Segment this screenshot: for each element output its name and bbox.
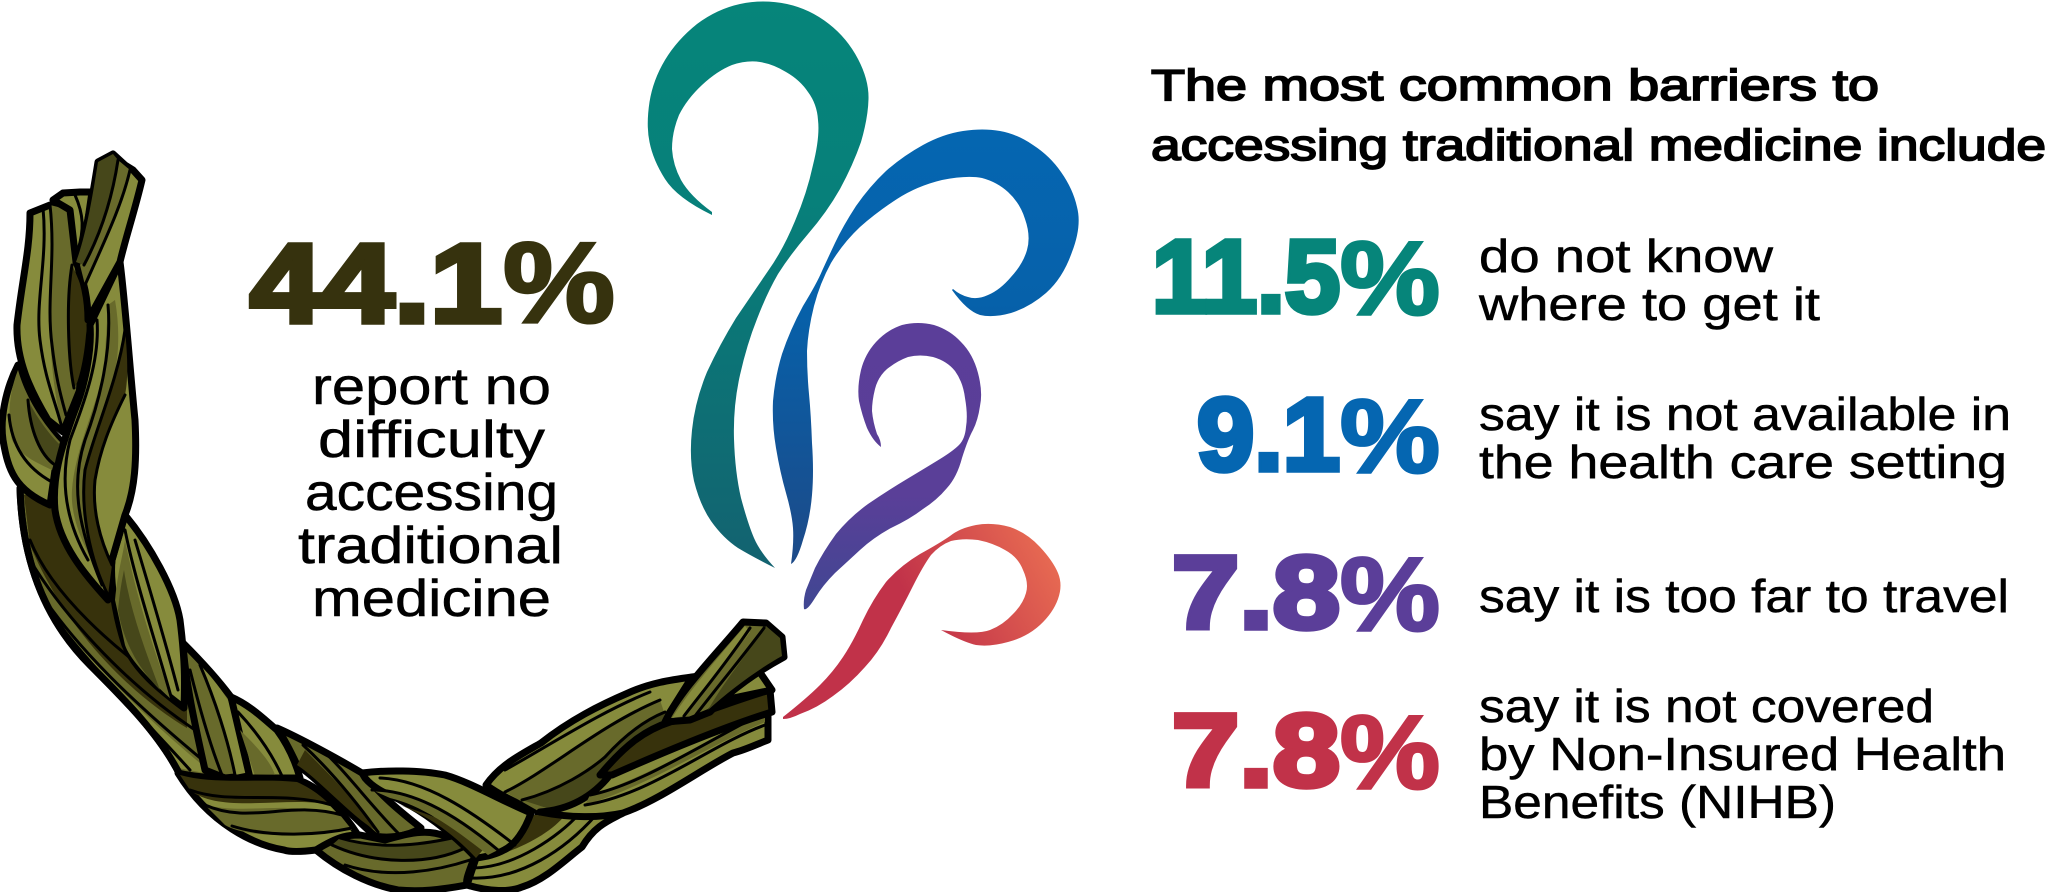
- braid: dark inner strand: [600, 690, 772, 775]
- stat: 9.1% not available: the health care setting: [1479, 436, 2007, 488]
- icon: red-orange smoke swirl: [783, 524, 1060, 719]
- icon: purple smoke swirl: [804, 323, 981, 609]
- stat: 7.8% too far: say it is too far to travel: [1479, 570, 2009, 622]
- braid: upper-left strand: [17, 205, 88, 432]
- stat: 7.8% not covered: 7.8: [1172, 693, 1340, 808]
- stat: 7.8% not covered: %: [1340, 695, 1440, 811]
- braid: upper end strand: [665, 622, 784, 722]
- braid: lower-left band: [16, 486, 205, 774]
- braid: right upper long band: [486, 677, 692, 812]
- icon: blue smoke swirl: [773, 130, 1079, 564]
- text block: report no difficulty: [298, 358, 563, 628]
- text block: report no difficulty: report no: [312, 358, 551, 416]
- stat: 7.8% too far: %: [1340, 537, 1440, 653]
- stat: 9.1% not available: [1197, 377, 2011, 495]
- braid: centre top band: [362, 771, 531, 858]
- braid: bottom-left band: [178, 773, 358, 852]
- icon: braided sweetgrass: [2, 154, 784, 891]
- braid: bottom right band: [467, 812, 623, 891]
- icon: teal smoke swirl: [648, 2, 869, 568]
- stat: 11.5% do not know: where to get it: [1478, 278, 1820, 330]
- text block: report no difficulty: difficulty: [318, 411, 545, 469]
- braid: left bulge strand: [2, 365, 60, 505]
- stat: 9.1% not available: 9.1: [1197, 377, 1340, 492]
- braid: centre diagonal strand: [277, 728, 421, 837]
- text block: report no difficulty: traditional: [298, 517, 563, 575]
- stat: 11.5% do not know: %: [1340, 221, 1440, 337]
- heading: barriers: [1151, 61, 2046, 170]
- braid: small back tips: [53, 192, 92, 262]
- stat: 44.1%: [250, 220, 615, 347]
- stat: 7.8% too far: [1172, 535, 2009, 653]
- stat: 44.1%: 44.1: [250, 221, 502, 346]
- stat: 11.5% do not know: 11.5: [1152, 219, 1340, 334]
- text block: report no difficulty: medicine: [312, 570, 551, 628]
- stat: 11.5% do not know: do not know: [1479, 230, 1774, 282]
- stat: 7.8% too far: 7.8: [1172, 535, 1340, 650]
- stat: 9.1% not available: %: [1340, 379, 1440, 495]
- stat: 9.1% not available: say it is not available in: [1479, 388, 2011, 440]
- braid: top-right strand: [76, 154, 142, 320]
- braid: right lower long band: [540, 700, 768, 817]
- heading: barriers: The most common barriers to: [1151, 61, 1879, 110]
- stat: 44.1%: %: [503, 220, 615, 347]
- text block: report no difficulty: accessing: [305, 464, 558, 522]
- stat: 11.5% do not know: [1152, 219, 1820, 337]
- braid: bottom centre band: [316, 832, 475, 891]
- braid: centre strand: [54, 262, 136, 600]
- stat: 7.8% not covered: Benefits (NIHB): [1479, 776, 1836, 828]
- stat: 7.8% not covered: by Non-Insured Health: [1479, 728, 2006, 780]
- stat: 7.8% not covered: say it is not covered: [1479, 680, 1934, 732]
- stat: 7.8% not covered: [1172, 680, 2006, 828]
- braid: lower-right narrow strand: [112, 515, 185, 708]
- braid: lower narrow strands: [183, 643, 300, 778]
- heading: barriers: accessing traditional medicine include: [1151, 121, 2046, 170]
